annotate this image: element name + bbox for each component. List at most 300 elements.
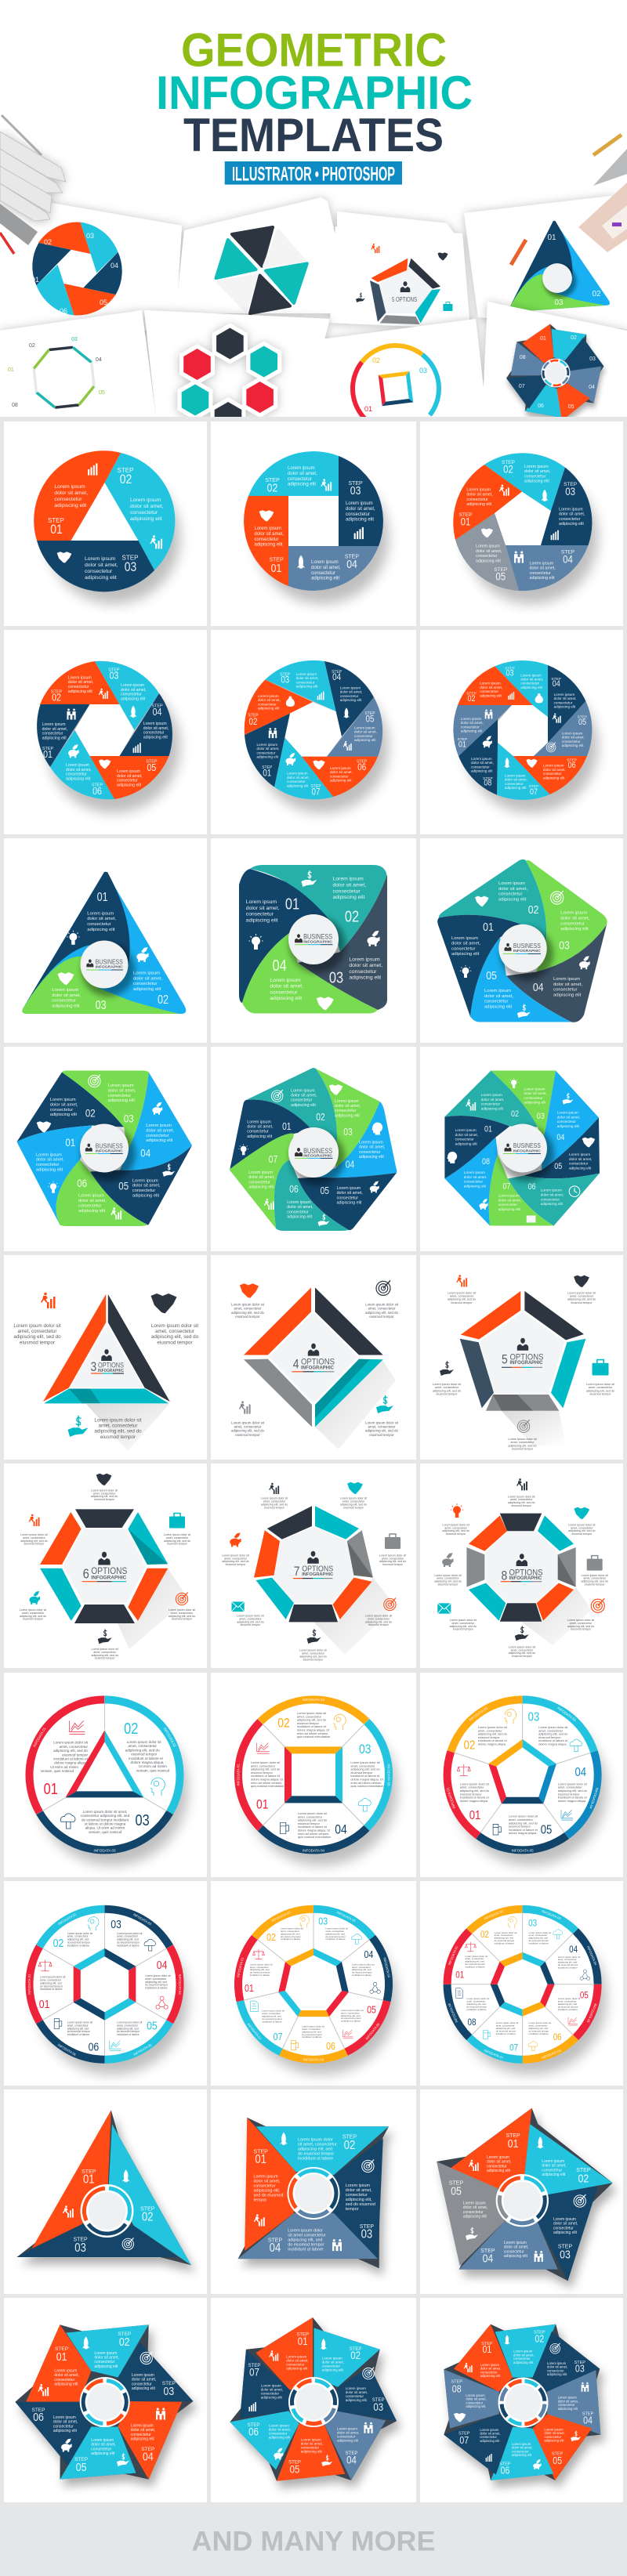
step labels: 05 bbox=[76, 2461, 87, 2473]
descriptions: consectetur bbox=[553, 2226, 574, 2230]
numbers bbox=[272, 895, 359, 986]
center title: INFOGRAPHIC bbox=[96, 965, 124, 969]
descriptions: Lorem ipsum bbox=[85, 556, 115, 562]
descriptions: adipiscing elit bbox=[461, 729, 483, 733]
descriptions: adipiscing elit bbox=[269, 2435, 291, 2440]
descriptions: amet, consectetur bbox=[67, 2024, 89, 2027]
step labels: 05 bbox=[451, 2184, 462, 2198]
descriptions: incididunt ut labore bbox=[67, 1944, 89, 1947]
descriptions: Lorem ipsum dolor sit bbox=[379, 1554, 406, 1557]
descriptions: incididunt ut labore bbox=[298, 2157, 333, 2162]
title: GEOMETRIC bbox=[181, 24, 447, 77]
mini chart: octagon ring numbers: 04 bbox=[96, 357, 102, 363]
step labels: STEP bbox=[51, 690, 63, 695]
descriptions: adipiscing elit bbox=[143, 735, 168, 740]
descriptions: consectetur bbox=[530, 571, 551, 576]
descriptions: veniam, quis nostrud bbox=[136, 1768, 170, 1772]
numbers: 03 bbox=[111, 1918, 121, 1930]
numbers: 04 bbox=[556, 1133, 565, 1142]
descriptions: incididunt ut labore et bbox=[251, 1774, 281, 1778]
descriptions: Lorem ipsum bbox=[287, 772, 308, 776]
descriptions: amet, consectetur bbox=[352, 1966, 371, 1969]
descriptions: incididunt ut labore bbox=[558, 2008, 578, 2011]
descriptions: adipiscing elit bbox=[108, 1098, 135, 1103]
ring: INFODATA 02 bbox=[162, 1727, 177, 1748]
numbers: 06 bbox=[77, 1177, 87, 1189]
descriptions: incididunt ut labore et bbox=[53, 1757, 89, 1761]
descriptions: Lorem ipsum bbox=[143, 722, 167, 726]
descriptions: adipiscing elit, sed bbox=[298, 2147, 332, 2152]
step labels: 05 bbox=[495, 570, 506, 583]
descriptions: adipiscing elit, sed do bbox=[568, 1529, 595, 1532]
descriptions: incididunt ut labore bbox=[495, 1941, 514, 1945]
segments bbox=[244, 451, 383, 591]
descriptions: dolor sit amet, bbox=[247, 1125, 274, 1130]
descriptions: dolor sit amet, bbox=[42, 727, 67, 732]
step labels: STEP bbox=[502, 460, 515, 465]
descriptions: do eiusmod tempor bbox=[117, 2030, 140, 2033]
center title: OPTIONS bbox=[91, 1565, 127, 1576]
descriptions: eiusmod tempor bbox=[382, 1563, 404, 1566]
descriptions: consectetur bbox=[254, 537, 279, 542]
step labels: 05 bbox=[147, 762, 157, 773]
descriptions: eiusmod tempor bbox=[512, 1448, 534, 1451]
descriptions: adipiscing elit, sed bbox=[40, 1981, 62, 1984]
descriptions: adipiscing elit bbox=[257, 755, 279, 759]
descriptions: amet, consectetur bbox=[117, 2024, 139, 2027]
descriptions: Lorem ipsum bbox=[466, 487, 491, 492]
mini chart: origami octagon numbers bbox=[519, 335, 596, 410]
step labels: STEP bbox=[248, 2423, 259, 2428]
descriptions: adipiscing elit bbox=[480, 2374, 501, 2378]
descriptions: enim ad minim veniam, bbox=[350, 1781, 382, 1785]
step labels: STEP bbox=[141, 2447, 154, 2452]
descriptions: Lorem ipsum bbox=[513, 2350, 532, 2353]
descriptions: incididunt ut labore bbox=[250, 1974, 270, 1977]
panel: 4 options diamond bbox=[211, 1255, 416, 1460]
descriptions: dolore magna aliqua. bbox=[460, 1799, 488, 1803]
descriptions: adipiscing elit bbox=[132, 1194, 159, 1199]
ring: INFODATA 04 bbox=[178, 1974, 182, 1995]
descriptions: Lorem ipsum dolor sit bbox=[53, 1741, 88, 1745]
descriptions: Lorem ipsum bbox=[498, 881, 525, 886]
step labels: 06 bbox=[357, 762, 366, 772]
descriptions: adipiscing elit, sed do bbox=[92, 1654, 118, 1657]
descriptions: dolor sit amet, bbox=[359, 1145, 385, 1150]
descriptions: amet, consectetur bbox=[263, 1500, 286, 1503]
descriptions: amet, consectetur bbox=[510, 1441, 535, 1444]
descriptions: incididunt ut labore bbox=[558, 1966, 578, 1969]
step labels bbox=[248, 670, 375, 798]
descriptions: adipiscing elit, sed bbox=[528, 2027, 548, 2030]
step labels: STEP bbox=[564, 482, 577, 487]
descriptions: Lorem ipsum bbox=[87, 911, 114, 916]
numbers: 04 bbox=[272, 956, 287, 974]
descriptions: adipiscing elit bbox=[322, 2368, 343, 2372]
descriptions: Lorem ipsum bbox=[559, 508, 583, 512]
descriptions: Lorem ipsum bbox=[296, 672, 317, 676]
center title: OPTIONS bbox=[301, 1357, 335, 1366]
descriptions: dolor sit amet, bbox=[461, 721, 484, 725]
descriptions: amet, consectetur bbox=[495, 1934, 513, 1937]
descriptions: quis nostrud exercitation bbox=[350, 1784, 384, 1788]
step labels: 06 bbox=[248, 2425, 259, 2438]
icons bbox=[29, 1474, 188, 1644]
panel: origami square bbox=[211, 2089, 416, 2294]
descriptions: amet, consectetur bbox=[171, 1612, 194, 1615]
descriptions: adipiscing elit, sed do bbox=[567, 1298, 596, 1301]
descriptions: consectetur bbox=[286, 2363, 305, 2367]
descriptions: Lorem ipsum bbox=[464, 1170, 485, 1174]
descriptions: consectetur bbox=[505, 782, 524, 786]
icons bbox=[238, 1084, 382, 1226]
icons bbox=[60, 1720, 165, 1829]
descriptions: incididunt ut labore bbox=[145, 1987, 168, 1990]
descriptions: consectetur bbox=[466, 2401, 484, 2404]
descriptions: dolor sit amet, bbox=[340, 690, 363, 694]
descriptions: consectetur bbox=[524, 1096, 543, 1100]
step labels: STEP bbox=[466, 691, 477, 696]
mini chart: hexagon shutter numbers: 04 bbox=[111, 262, 118, 270]
panel: rim circle 3 bbox=[2, 1672, 208, 1878]
step labels: STEP bbox=[146, 760, 158, 765]
descriptions: amet, consectetur bbox=[145, 1977, 167, 1981]
mini chart: octagon ring numbers: 01 bbox=[8, 367, 14, 373]
descriptions: dolore magna aliqua. bbox=[478, 1742, 506, 1746]
step labels: STEP bbox=[567, 758, 577, 763]
center title bbox=[501, 1554, 542, 1583]
icons bbox=[454, 2335, 589, 2469]
descriptions: do eiusmod tempor bbox=[325, 1935, 346, 1938]
numbers: 02 bbox=[53, 1937, 63, 1949]
center title: INFOGRAPHIC bbox=[509, 1576, 542, 1581]
descriptions: adipiscing elit, sed do bbox=[508, 1501, 535, 1504]
descriptions: adipiscing elit bbox=[288, 483, 316, 487]
numbers: 04 bbox=[346, 1160, 355, 1170]
descriptions: adipiscing elit bbox=[311, 577, 339, 581]
descriptions: dolor sit amet, bbox=[130, 504, 164, 509]
descriptions: incididunt ut labore bbox=[117, 1944, 140, 1947]
descriptions: Lorem ipsum bbox=[558, 2396, 577, 2400]
descriptions: Lorem ipsum bbox=[346, 2386, 366, 2390]
descriptions: Lorem ipsum dolor sit bbox=[509, 1645, 535, 1648]
descriptions: adipiscing elit bbox=[286, 2367, 308, 2371]
descriptions bbox=[41, 1740, 170, 1834]
numbers bbox=[483, 903, 570, 993]
descriptions: adipiscing elit bbox=[258, 707, 280, 711]
descriptions: adipiscing elit bbox=[512, 2453, 532, 2457]
descriptions: eiusmod tempor bbox=[451, 1301, 473, 1304]
numbers: 07 bbox=[274, 2031, 283, 2042]
descriptions: dolor sit amet, bbox=[78, 1199, 107, 1203]
numbers: 01 bbox=[455, 1970, 464, 1981]
descriptions: adipiscing elit, sed do bbox=[538, 1732, 567, 1736]
descriptions: adipiscing elit, sed bbox=[145, 1981, 167, 1984]
descriptions: eiusmod tempor bbox=[368, 1623, 390, 1626]
descriptions: dolor sit amet, bbox=[524, 469, 550, 474]
numbers: 02 bbox=[528, 903, 538, 916]
descriptions: adipiscing elit bbox=[53, 2429, 78, 2433]
step labels: STEP bbox=[269, 558, 284, 563]
descriptions: eiusmod tempor bbox=[297, 1721, 320, 1725]
descriptions bbox=[42, 675, 169, 787]
step labels: 04 bbox=[483, 2252, 494, 2265]
descriptions: quis nostrud exercitation bbox=[297, 1735, 330, 1738]
descriptions: consectetur bbox=[346, 2193, 368, 2198]
descriptions bbox=[460, 1725, 588, 1835]
descriptions: adipiscing elit bbox=[42, 736, 67, 740]
descriptions: Lorem ipsum bbox=[543, 764, 564, 768]
descriptions: dolor sit amet, bbox=[131, 2428, 155, 2433]
step labels: STEP bbox=[494, 567, 507, 573]
descriptions: adipiscing elit bbox=[50, 1113, 77, 1117]
step labels: 02 bbox=[578, 2172, 589, 2185]
descriptions: adipiscing elit bbox=[133, 987, 161, 992]
numbers: 04 bbox=[569, 1945, 578, 1955]
panel: swirl triangle bbox=[4, 838, 207, 1043]
descriptions: incididunt ut labore bbox=[67, 2033, 89, 2036]
panel: 8 options octagon bbox=[420, 1463, 623, 1668]
descriptions: sed do eiusmod bbox=[346, 2202, 375, 2207]
step labels: 02 bbox=[249, 717, 257, 727]
numbers: 02 bbox=[277, 1716, 290, 1731]
center title bbox=[295, 932, 333, 945]
center title: INFOGRAPHIC bbox=[509, 1361, 543, 1366]
descriptions: do eiusmod tempor bbox=[298, 2152, 334, 2157]
descriptions: eiusmod tempor bbox=[226, 1563, 246, 1566]
step labels: STEP bbox=[82, 2169, 96, 2175]
mini chart: hexagon shutter numbers: 05 bbox=[100, 298, 107, 306]
numbers: 01 bbox=[245, 1982, 254, 1994]
descriptions: dolor sit amet, bbox=[569, 1157, 592, 1161]
step labels: STEP bbox=[345, 555, 359, 559]
descriptions: eiusmod tempor bbox=[446, 1532, 466, 1536]
descriptions: dolor sit amet, bbox=[463, 2205, 487, 2210]
descriptions: Lorem ipsum dolor sit bbox=[92, 1648, 118, 1651]
descriptions: consectetur bbox=[520, 682, 540, 686]
icons bbox=[251, 1916, 380, 2050]
mini chart: swirl triangle numbers bbox=[547, 233, 601, 307]
descriptions: dolor sit amet, bbox=[544, 2431, 565, 2435]
numbers: 02 bbox=[266, 1931, 276, 1943]
descriptions: Lorem ipsum bbox=[301, 2437, 321, 2441]
ring: INFODATA 06 bbox=[57, 2043, 77, 2057]
numbers: 03 bbox=[537, 1112, 545, 1121]
step labels: STEP bbox=[108, 668, 120, 672]
descriptions: Lorem ipsum bbox=[132, 1178, 158, 1183]
descriptions: adipiscing elit bbox=[130, 516, 162, 522]
descriptions: consectetur bbox=[463, 2210, 484, 2215]
descriptions: Lorem ipsum bbox=[254, 526, 281, 531]
descriptions: dolor sit amet, bbox=[311, 566, 341, 570]
descriptions: adipiscing elit bbox=[335, 1113, 360, 1118]
descriptions: dolor sit amet, bbox=[346, 2188, 372, 2193]
numbers: 01 bbox=[285, 895, 299, 913]
descriptions: Lorem ipsum bbox=[42, 722, 66, 727]
descriptions: eiusmod tempor bbox=[235, 1433, 260, 1437]
descriptions: Lorem ipsum bbox=[554, 693, 574, 696]
descriptions: consectetur bbox=[461, 725, 480, 729]
icons bbox=[254, 2133, 374, 2251]
descriptions: dolor sit amet, bbox=[542, 2164, 567, 2169]
descriptions: eiusmod tempor bbox=[478, 1735, 500, 1739]
descriptions: adipiscing elit bbox=[346, 518, 374, 523]
segments bbox=[239, 865, 387, 1014]
descriptions: Lorem ipsum bbox=[337, 2427, 357, 2431]
ring bbox=[207, 1669, 420, 1881]
descriptions: adipiscing elit, sed bbox=[496, 2027, 516, 2030]
descriptions bbox=[466, 465, 585, 581]
step labels: 01 bbox=[83, 2173, 95, 2187]
step labels: STEP bbox=[350, 2347, 361, 2352]
numbers: 03 bbox=[343, 1127, 353, 1138]
step labels: STEP bbox=[458, 2432, 470, 2437]
panel: 3 options triangle bbox=[4, 1255, 207, 1460]
descriptions: eiusmod tempor bbox=[167, 1543, 188, 1546]
descriptions: adipiscing elit bbox=[91, 2451, 115, 2456]
ring: INFODATA 02 bbox=[468, 1706, 488, 1722]
descriptions: consectetur bbox=[257, 751, 276, 754]
descriptions: amet, consectetur bbox=[59, 1745, 88, 1749]
step labels: STEP bbox=[262, 765, 273, 770]
descriptions: Lorem ipsum dolor sit bbox=[509, 1814, 538, 1818]
descriptions bbox=[465, 1931, 581, 2035]
descriptions: Lorem ipsum bbox=[50, 1098, 76, 1102]
icons bbox=[58, 931, 149, 985]
descriptions: adipiscing elit bbox=[543, 776, 565, 780]
descriptions: do eiusmod tempor bbox=[352, 1971, 372, 1974]
descriptions: adipiscing elit bbox=[87, 928, 115, 932]
descriptions: Lorem ipsum dolor sit bbox=[302, 2025, 324, 2028]
descriptions: adipiscing elit bbox=[547, 2372, 567, 2376]
descriptions: adipiscing elit, sed bbox=[528, 1937, 548, 1940]
descriptions: amet, consectetur bbox=[341, 2011, 360, 2014]
descriptions: adipiscing elit bbox=[487, 2169, 511, 2173]
step labels: 04 bbox=[563, 553, 573, 566]
paper sheets: lower row bbox=[0, 302, 627, 423]
descriptions: adipiscing elit, sed do bbox=[164, 1539, 190, 1543]
segments bbox=[437, 2108, 613, 2281]
step labels: STEP bbox=[140, 2207, 155, 2212]
descriptions: amet, consectetur bbox=[350, 1764, 375, 1767]
ring: INFODATA 04 bbox=[382, 1957, 391, 1978]
descriptions bbox=[231, 1302, 399, 1437]
panel: shutter circle 4 steps bbox=[211, 421, 416, 626]
descriptions: consectetur bbox=[85, 569, 113, 574]
descriptions: dolor sit amet, bbox=[330, 770, 353, 774]
descriptions: do eiusmod tempor bbox=[528, 2029, 549, 2032]
title: INFOGRAPHIC bbox=[156, 67, 473, 119]
numbers: 01 bbox=[39, 1998, 49, 2010]
step labels: STEP bbox=[296, 2333, 309, 2338]
step labels: 08 bbox=[484, 779, 492, 788]
descriptions: Lorem ipsum bbox=[553, 2217, 576, 2222]
step labels: STEP bbox=[558, 2245, 572, 2250]
step labels: STEP bbox=[346, 2451, 357, 2456]
step labels: 02 bbox=[52, 691, 61, 704]
descriptions: dolor sit amet, bbox=[466, 2397, 487, 2401]
descriptions: adipiscing elit bbox=[131, 2437, 154, 2442]
step labels: 03 bbox=[560, 2248, 571, 2261]
descriptions: Lorem ipsum bbox=[332, 877, 364, 882]
descriptions: do eiusmod tempor bbox=[262, 2017, 282, 2021]
step labels: 04 bbox=[553, 679, 560, 689]
descriptions: adipiscing elit, sed bbox=[558, 1961, 578, 1964]
numbers bbox=[39, 1918, 168, 2053]
descriptions: consectetur bbox=[542, 2168, 562, 2173]
descriptions: Lorem ipsum dolor sit bbox=[299, 1649, 327, 1652]
descriptions: adipiscing elit, sed bbox=[325, 1932, 345, 1935]
descriptions: dolor sit amet, bbox=[504, 2245, 528, 2250]
panel: hero banner bbox=[0, 24, 627, 457]
descriptions: eiusmod tempor bbox=[62, 1753, 88, 1757]
descriptions: Lorem ipsum dolor sit bbox=[508, 1495, 535, 1498]
descriptions: adipiscing elit bbox=[513, 2361, 534, 2364]
numbers: 02 bbox=[124, 1719, 138, 1737]
descriptions: consectetur bbox=[541, 1197, 560, 1201]
descriptions bbox=[36, 1084, 174, 1214]
descriptions: adipiscing elit bbox=[466, 502, 492, 507]
numbers: 05 bbox=[118, 1180, 129, 1192]
descriptions: adipiscing elit, sed do bbox=[365, 1429, 399, 1433]
descriptions: amet, consectetur bbox=[128, 1744, 157, 1748]
icons bbox=[447, 1078, 595, 1223]
descriptions: adipiscing elit bbox=[544, 2438, 564, 2443]
descriptions: adipiscing elit, sed do bbox=[299, 1655, 327, 1658]
descriptions: eiusmod tempor bbox=[343, 1506, 364, 1509]
panel: swirl hexagon bbox=[4, 1047, 207, 1251]
center title: BUSINESS bbox=[303, 932, 332, 940]
descriptions: adipiscing elit bbox=[261, 2396, 282, 2400]
descriptions: incididunt ut labore et bbox=[350, 1774, 380, 1778]
descriptions: incididunt ut labore bbox=[528, 2032, 549, 2035]
descriptions: eiusmod tempor bbox=[509, 1825, 531, 1829]
descriptions: consectetur adipiscing elit, sed bbox=[81, 1814, 130, 1818]
descriptions: eiusmod tempor bbox=[438, 1583, 458, 1586]
descriptions bbox=[466, 2350, 578, 2457]
segments bbox=[22, 872, 186, 1014]
descriptions: Lorem ipsum bbox=[461, 717, 481, 721]
descriptions: amet, consectetur bbox=[570, 1622, 593, 1625]
descriptions: Lorem ipsum dolor sit bbox=[237, 1614, 264, 1617]
segments bbox=[453, 453, 592, 591]
descriptions: do eiusmod tempor bbox=[465, 1963, 485, 1966]
descriptions: Lorem ipsum bbox=[270, 978, 301, 983]
descriptions: dolor sit amet, bbox=[466, 493, 493, 497]
step labels bbox=[459, 460, 577, 583]
descriptions: dolor sit amet, bbox=[559, 512, 585, 517]
ring: INFODATA 01 bbox=[27, 1974, 31, 1995]
descriptions: do eiusmod tempor bbox=[528, 1939, 549, 1942]
descriptions bbox=[451, 881, 590, 1009]
descriptions: adipiscing elit, sed bbox=[341, 2014, 361, 2017]
descriptions: dolore magna aliqua. bbox=[558, 1799, 586, 1803]
descriptions: Lorem ipsum dolor sit bbox=[231, 1302, 264, 1306]
icons bbox=[483, 692, 561, 768]
step labels: 03 bbox=[373, 2401, 383, 2413]
step labels bbox=[265, 478, 363, 574]
ring: INFODATA 03 bbox=[556, 1706, 577, 1722]
descriptions: Lorem ipsum dolor sit bbox=[297, 1711, 326, 1715]
descriptions: consectetur bbox=[322, 2364, 340, 2368]
descriptions: Lorem ipsum dolor sit bbox=[20, 1608, 46, 1612]
descriptions: consectetur bbox=[288, 477, 312, 482]
step labels: STEP bbox=[342, 2134, 357, 2140]
step labels: 01 bbox=[50, 523, 63, 537]
descriptions: amet, consectetur bbox=[528, 2024, 547, 2028]
descriptions: adipiscing elit, sed do bbox=[237, 1620, 264, 1623]
center title bbox=[295, 1147, 333, 1158]
